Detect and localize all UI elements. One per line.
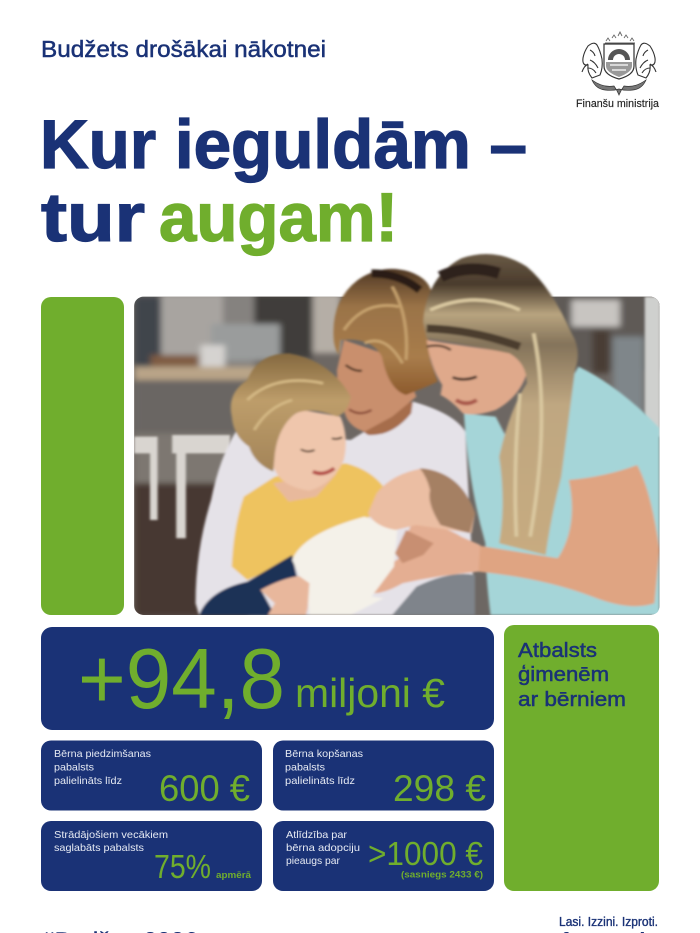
boy: eyes and mouth	[301, 437, 342, 451]
mother: hand	[373, 525, 480, 593]
father: lower sleeve	[392, 574, 475, 615]
card: working parents: saglabāts pabalsts	[54, 843, 144, 854]
panel: topic label: Atbalsts	[518, 639, 597, 662]
baby: hand	[260, 576, 309, 615]
title	[40, 106, 527, 256]
mother: face	[427, 340, 527, 414]
father: fingers behind baby	[395, 530, 434, 563]
photo background: kitchen	[134, 293, 661, 617]
mother: hair	[423, 254, 578, 555]
card: birth benefit: pabalsts	[54, 762, 94, 774]
panel: topic label	[504, 625, 659, 891]
card: childcare benefit: palielināts līdz	[285, 776, 355, 787]
baby: head	[368, 468, 475, 533]
baby: body	[292, 517, 397, 615]
card: birth benefit: Bērna piedzimšanas	[54, 749, 151, 760]
panel: green side block	[41, 297, 124, 615]
boy: face	[266, 410, 346, 491]
icon: shield	[604, 44, 634, 79]
father: shirt	[196, 402, 475, 615]
father: mouth and eye	[349, 409, 372, 413]
card: birth benefit: palielināts līdz	[54, 776, 122, 787]
panel: main figure	[41, 627, 494, 730]
card: childcare benefit	[273, 740, 494, 810]
icon: griffin	[636, 43, 656, 78]
card: childcare benefit: pabalsts	[285, 762, 325, 774]
mother: shirt	[464, 367, 660, 615]
boy: hair	[231, 353, 351, 472]
card: working parents: 75%	[154, 848, 211, 885]
card: adoption benefit: >1000 €	[368, 835, 483, 872]
boy: neck	[273, 473, 337, 502]
footer: tagline and website: Lasi. Izzini. Izproti.	[559, 915, 658, 929]
header subtitle: Budžets drošākai nākotnei	[41, 36, 326, 62]
card: childcare benefit: Bērna kopšanas	[285, 749, 363, 760]
main number: +94,8	[78, 632, 285, 727]
title: augam!	[159, 179, 398, 256]
card: adoption benefit: Atlīdzība par	[286, 830, 348, 841]
card: working parents: apmērā	[216, 870, 252, 880]
mother: eye and mouth	[453, 377, 477, 379]
card: birth benefit	[41, 740, 262, 810]
father: hair	[333, 269, 438, 395]
ministry name: Finanšu ministrija	[576, 98, 660, 110]
photo people	[196, 254, 660, 615]
icon: oak branches	[592, 80, 646, 95]
title: Kur ieguldām –	[40, 106, 527, 183]
father: neck	[351, 402, 413, 435]
card: adoption benefit	[273, 821, 494, 891]
title: tur	[41, 179, 145, 256]
card: working parents: Strādājošiem vecākiem	[54, 830, 168, 841]
card: birth benefit: 600 €	[159, 768, 250, 809]
card: working parents	[41, 821, 262, 891]
photo: family with newborn	[134, 254, 661, 617]
card: adoption benefit: bērna adopciju	[286, 843, 360, 854]
panel: topic label: ģimenēm	[518, 663, 609, 686]
card: adoption benefit: pieaugs par	[286, 856, 341, 867]
baby: hair	[420, 468, 475, 533]
icon: lion	[582, 43, 602, 78]
boy: shirt	[232, 463, 385, 580]
logo: coat of arms and ministry name	[576, 32, 660, 110]
icon: stars above the shield	[605, 32, 635, 43]
card: childcare benefit: 298 €	[393, 768, 486, 809]
main unit: miljoni €	[295, 670, 445, 716]
card: adoption benefit: (sasniegs 2433 €)	[401, 870, 483, 880]
father: face	[337, 340, 416, 432]
panel: topic label: ar bērniem	[518, 688, 626, 711]
mother: arm	[475, 465, 660, 606]
boy: trousers	[199, 555, 297, 615]
